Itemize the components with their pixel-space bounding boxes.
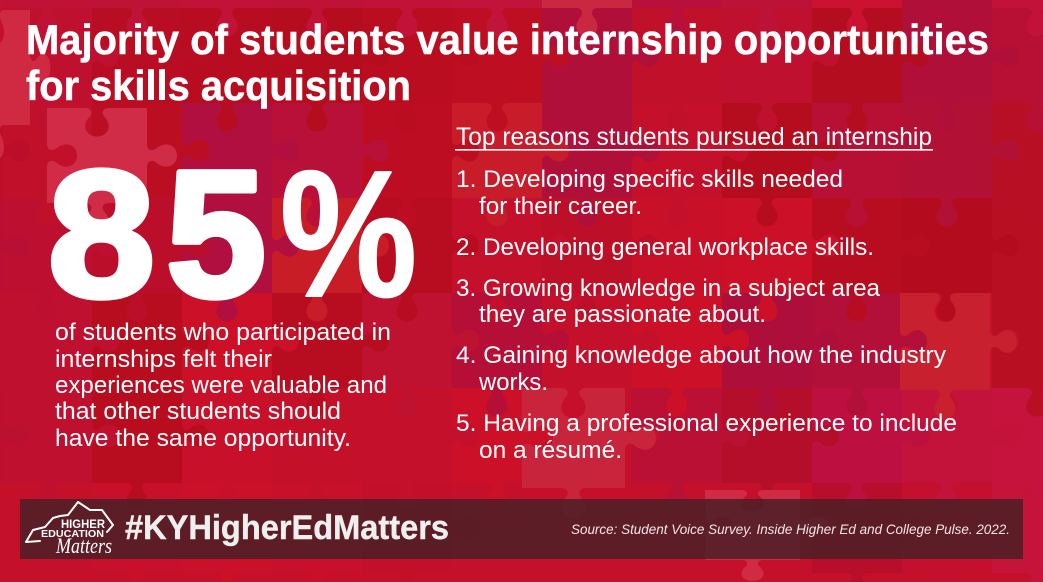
logo: Higher Education Matters: HIGHER [61,519,106,531]
reason 5: on a résumé. [479,437,622,464]
big statistic: 85%: 5 [166,134,266,335]
source note: Source: Student Voice Survey. Inside Higher Ed and College Pulse. 2022. [571,521,1010,537]
heading: top reasons: Top reasons students pursued an internship [456,123,932,151]
hashtag: #KYHigherEdMatters [125,509,449,547]
reason 4: 4. Gaining knowledge about how the industry [456,342,946,369]
statistic description: of students who participated in [55,319,391,346]
statistic description: internships felt their [55,346,272,373]
reason 2: 2. Developing general workplace skills. [456,234,874,261]
statistic description: experiences were valuable and [55,372,387,399]
title: for skills acquisition [26,62,411,109]
reason 3: 3. Growing knowledge in a subject area [456,275,881,302]
title [26,16,989,109]
big statistic: 85%: % [280,134,417,335]
big statistic: 85%: 8 [48,134,155,335]
reason 3 [456,275,881,328]
reason 4: works. [478,369,548,396]
list of reasons [456,166,957,464]
title: Majority of students value internship opportunities [26,16,989,63]
statistic description: that other students should [55,398,341,425]
reason 3: they are passionate about. [479,301,766,328]
reason 5 [456,410,957,464]
reason 1: 1. Developing specific skills needed [456,166,843,193]
statistic description [55,319,391,452]
footer bar [20,499,1023,559]
logo: Higher Education Matters: EDUCATION [41,529,104,540]
logo: Higher Education Matters: Matters [55,533,112,558]
statistic description: have the same opportunity. [55,425,351,452]
reason 4 [456,342,946,396]
reason 5: 5. Having a professional experience to include [456,410,957,437]
reason 1: for their career. [479,193,642,220]
big statistic: 85% [48,134,417,335]
reason 1 [456,166,843,220]
logo: Higher Education Matters [26,502,113,558]
